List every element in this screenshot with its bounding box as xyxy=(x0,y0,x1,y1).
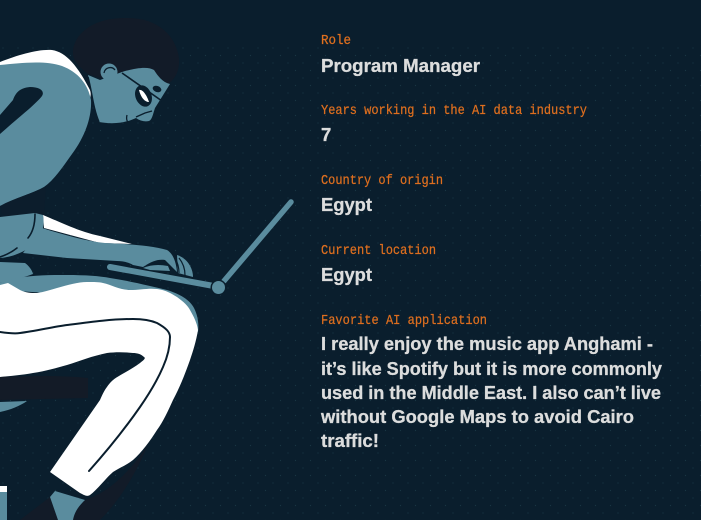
white trousers xyxy=(0,282,198,496)
field: current location xyxy=(321,243,436,285)
glasses lens xyxy=(132,83,155,109)
white sleeve strip xyxy=(43,215,132,244)
eyebrow xyxy=(152,85,162,93)
paragraph: I really enjoy the music app Anghami - xyxy=(321,333,653,354)
ankle xyxy=(50,491,85,520)
chair leg xyxy=(0,492,7,520)
label: Favorite AI application xyxy=(321,313,487,329)
label: Years working in the AI data industry xyxy=(321,103,587,119)
ear xyxy=(100,64,118,80)
thigh xyxy=(0,262,33,283)
white chair block xyxy=(0,486,7,492)
field: country of origin xyxy=(321,173,443,215)
paragraph: it’s like Spotify but it is more commonly xyxy=(321,358,663,379)
eye white xyxy=(139,90,149,102)
trouser seam xyxy=(0,319,170,471)
field: years in industry xyxy=(321,103,587,145)
value: Egypt xyxy=(321,194,372,215)
illustration: person hunched over a laptop xyxy=(0,18,198,520)
arm hole xyxy=(0,87,43,134)
label: Country of origin xyxy=(321,173,443,189)
knee xyxy=(0,213,44,258)
glasses arm xyxy=(122,73,162,101)
value: 7 xyxy=(321,124,331,145)
laptop xyxy=(110,202,291,296)
value: Egypt xyxy=(321,264,372,285)
white shirt collar xyxy=(0,50,91,100)
knee fold lines xyxy=(0,214,35,257)
paragraph: used in the Middle East. I also can’t live xyxy=(321,382,661,403)
field: favorite AI application xyxy=(320,313,663,451)
field: role xyxy=(321,33,480,76)
smile crease xyxy=(127,115,129,123)
neck outline xyxy=(88,77,99,122)
neck and face xyxy=(88,68,170,123)
fingers xyxy=(177,255,193,277)
paragraph xyxy=(320,333,663,451)
paragraph: without Google Maps to avoid Cairo xyxy=(320,406,634,427)
forearm and hand xyxy=(23,228,177,272)
laptop screen xyxy=(224,202,291,281)
seat sliver xyxy=(0,401,27,412)
torso xyxy=(0,62,91,206)
mouth xyxy=(136,111,152,117)
finger gaps xyxy=(175,258,185,275)
paragraph: traffic! xyxy=(321,430,379,451)
label: Role xyxy=(321,33,351,49)
value: Program Manager xyxy=(321,55,480,76)
seat shadow xyxy=(0,376,88,400)
head xyxy=(88,64,170,123)
thumb xyxy=(143,265,170,271)
dark sleeve shadow xyxy=(0,186,46,216)
hair xyxy=(73,18,179,84)
laptop hinge xyxy=(210,280,226,296)
laptop base xyxy=(110,267,211,286)
shoe shadow xyxy=(20,445,148,520)
label: Current location xyxy=(321,243,436,259)
inner ear xyxy=(104,68,115,73)
trouser shadow xyxy=(0,275,198,332)
